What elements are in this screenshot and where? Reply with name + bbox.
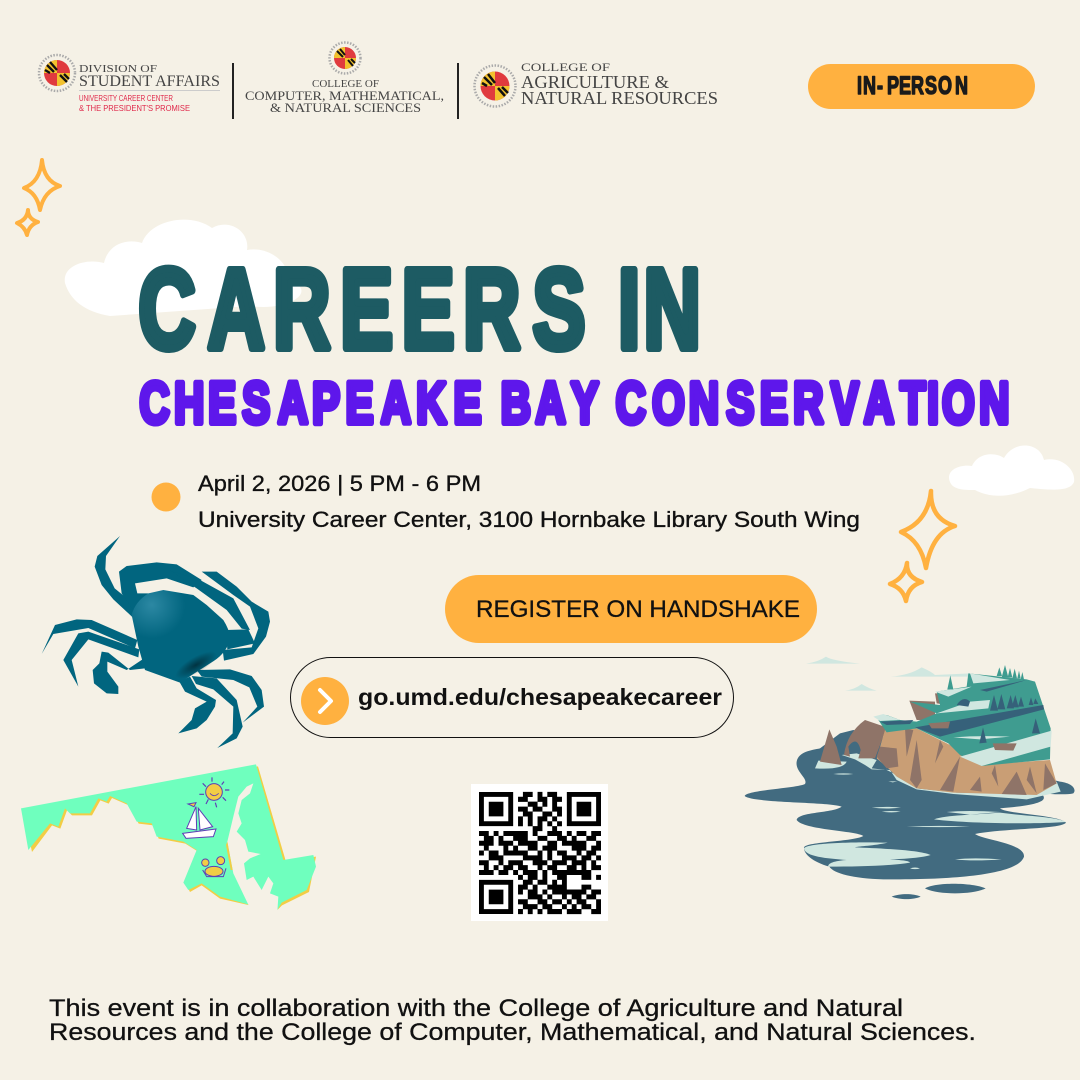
subtitle: Chesapeake Bay Conservation: CHESAPEAKE BAY CONSERVATION	[140, 370, 1009, 436]
logo: Division of Student Affairs: STUDENT AFFAIRS	[79, 73, 220, 90]
icon: sparkles right	[890, 491, 955, 601]
bullet dot	[152, 482, 180, 512]
dark ridge	[880, 680, 1044, 737]
link pill: go.umd.edu/chesapeakecareer	[358, 684, 722, 710]
icon: sparkles top left	[17, 160, 60, 235]
icon: sailboat	[183, 803, 216, 838]
badge: in-person: IN-PERSON	[857, 71, 968, 100]
map land	[21, 764, 316, 910]
shoreline	[842, 753, 1061, 799]
logo: College of Agriculture and Natural Resources: AGRICULTURE &	[521, 72, 669, 92]
button: register on Handshake: REGISTER ON HANDSHAKE	[476, 596, 800, 623]
cliff face	[877, 728, 1057, 795]
link pill	[290, 658, 734, 738]
footer note: This event is in collaboration with the College of Agriculture and Natural	[49, 995, 903, 1022]
clouds	[806, 657, 970, 691]
snow patches	[873, 673, 1052, 766]
footer note: Resources and the College of Computer, Mathematical, and Natural Sciences.	[49, 1019, 976, 1046]
icon: sun	[199, 777, 229, 807]
cloud behind title	[65, 220, 301, 316]
rock stack	[820, 729, 842, 765]
brush	[928, 722, 1017, 751]
badge: in-person	[808, 64, 1035, 109]
button: register on Handshake	[445, 575, 817, 643]
trees	[947, 665, 1024, 689]
event details	[198, 471, 860, 532]
logo: College of Computer, Mathematical and Natural Sciences: COMPUTER, MATHEMATICAL,	[245, 88, 444, 103]
map bay	[227, 783, 278, 912]
cliff top	[878, 673, 1051, 766]
event details: University Career Center, 3100 Hornbake Library South Wing	[198, 507, 860, 532]
icon: small crab	[202, 857, 226, 877]
cloud right	[949, 445, 1074, 496]
icon: chevron circle	[301, 677, 349, 725]
logo: College of Computer, Mathematical and Natural Sciences: COLLEGE OF	[312, 79, 379, 90]
map shadow	[23, 766, 316, 910]
logo: College of Computer, Mathematical and Natural Sciences	[245, 42, 444, 115]
logo: College of Computer, Mathematical and Natural Sciences: & NATURAL SCIENCES	[270, 100, 421, 115]
icon: Maryland map	[21, 764, 316, 912]
event details: April 2, 2026 | 5 PM - 6 PM	[198, 471, 481, 496]
water highlights	[804, 761, 1066, 869]
QR code	[471, 784, 608, 921]
logo: Division of Student Affairs	[39, 55, 220, 113]
logo: Division of Student Affairs: DIVISION OF	[79, 64, 157, 75]
title: Careers In: CAREERS IN	[139, 246, 701, 372]
logo: Division of Student Affairs: & THE PRESIDENT'S PROMISE	[79, 103, 190, 113]
illustration: cliff and water	[745, 657, 1075, 899]
water	[745, 730, 1075, 879]
logo: College of Agriculture and Natural Resources	[474, 60, 718, 108]
arch	[844, 720, 887, 758]
logo: College of Agriculture and Natural Resources: NATURAL RESOURCES	[521, 88, 718, 108]
cliff shadows	[877, 728, 1057, 795]
footer note	[49, 995, 976, 1046]
icon: blue crab	[42, 536, 270, 748]
logo: Division of Student Affairs: UNIVERSITY CAREER CENTER	[79, 93, 173, 103]
logo: College of Agriculture and Natural Resources: COLLEGE OF	[521, 60, 610, 74]
